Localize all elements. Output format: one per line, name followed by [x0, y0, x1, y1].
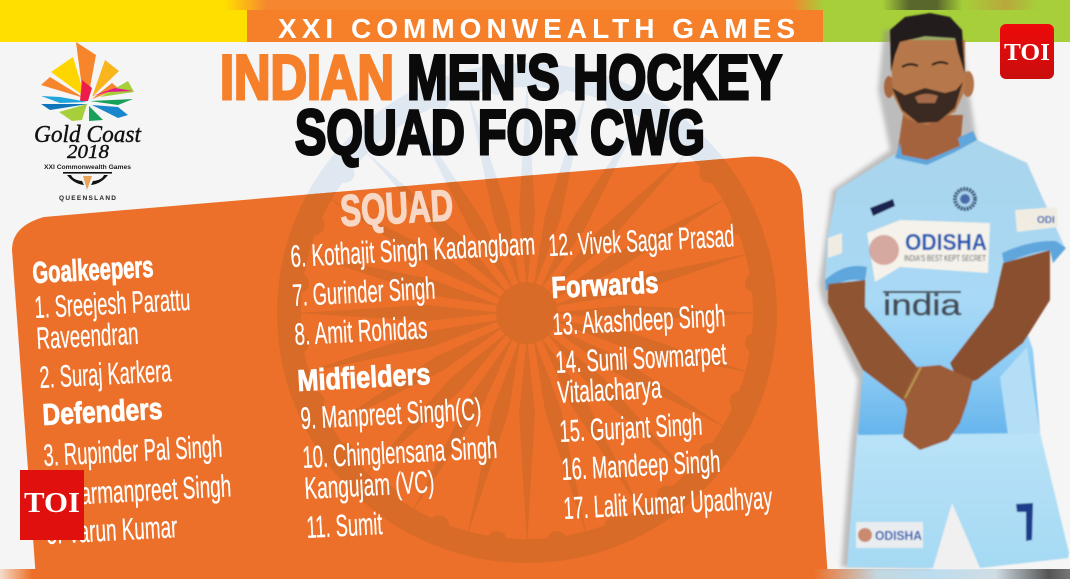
TOI badge: top right — [1000, 24, 1054, 79]
logo: Gold Coast 2018: 2018 — [67, 141, 109, 163]
bottom blurred strip — [0, 569, 1070, 579]
squad column 3: Forwards — [551, 266, 659, 305]
squad column 1: 2. Suraj Karkera — [39, 353, 173, 395]
squad column 2: 6. Kothajit Singh Kadangbam — [290, 226, 536, 274]
squad column 1: Goalkeepers — [32, 251, 154, 290]
collar — [895, 131, 977, 165]
squad column 1: 5. Varun Kumar — [46, 509, 178, 551]
squad column 2: 7. Gurinder Singh — [292, 271, 436, 313]
sleeve cuffs — [825, 266, 867, 291]
squad column 2: 9. Manpreet Singh(C) — [300, 392, 482, 436]
hair — [890, 13, 965, 74]
beard — [892, 82, 963, 123]
squad column 2: 8. Amit Rohidas — [294, 310, 428, 352]
squad column 3: 12. Vivek Sagar Prasad — [548, 218, 735, 263]
squad column 2: Midfielders — [297, 358, 431, 398]
orange squad panel — [12, 157, 828, 579]
squad column 1: Raveendran — [36, 316, 139, 356]
left arm — [828, 280, 925, 402]
title: SQUAD FOR CWG — [295, 98, 705, 168]
squad column 1 — [32, 251, 232, 551]
logo: Gold Coast 2018: XXI Commonwealth Games — [44, 164, 131, 171]
ashoka chakra watermark — [287, 73, 767, 553]
squad column 2: 10. Chinglensana Singh — [302, 430, 498, 475]
squad column 3: 16. Mandeep Singh — [561, 444, 721, 487]
squad column 3 — [548, 218, 773, 526]
header band — [0, 0, 1070, 44]
squad column 1: 3. Rupinder Pal Singh — [43, 429, 223, 473]
hands — [903, 365, 973, 450]
player shadow — [819, 30, 1000, 567]
shorts — [847, 433, 1069, 568]
squad column 1: 1. Sreejesh Parattu — [34, 282, 191, 325]
chakra on panel — [277, 158, 777, 563]
player photo: ODI — [1037, 215, 1055, 226]
shirt number — [1016, 503, 1033, 541]
logo burst — [41, 42, 134, 121]
shirt maker logo — [870, 199, 895, 216]
squad column 2: Kangujam (VC) — [304, 464, 435, 506]
title: MEN'S HOCKEY — [407, 43, 782, 113]
player photo: INDIA'S BEST KEPT SECRET — [904, 253, 986, 263]
face — [890, 40, 965, 125]
squad column 2: 11. Sumit — [306, 506, 383, 545]
crest — [955, 189, 975, 209]
gap between legs — [933, 503, 980, 569]
TOI badge: top right: TOI — [1004, 40, 1050, 66]
player photo — [819, 13, 1069, 569]
jersey side panel — [1000, 347, 1040, 435]
squad heading: SQUAD — [339, 181, 454, 236]
TOI badge: left: TOI — [24, 488, 80, 519]
squad column 3: Vitalacharya — [557, 370, 663, 410]
squad column 1: 4. Harmanpreet Singh — [45, 468, 232, 513]
right arm — [950, 250, 1050, 385]
sponsor patch — [867, 220, 990, 282]
player photo: ODISHA — [905, 229, 987, 255]
squad column 3: 17. Lalit Kumar Upadhyay — [563, 480, 773, 526]
shorts patch — [856, 522, 923, 548]
ears — [884, 76, 894, 98]
squad column 2 — [290, 226, 536, 545]
squad column 3: 15. Gurjant Singh — [559, 407, 703, 449]
squad column 3: 13. Akashdeep Singh — [552, 298, 726, 342]
logo wordmark: Gold Coast — [34, 122, 142, 148]
squad column 1: Defenders — [42, 393, 163, 432]
TOI badge: left — [20, 470, 84, 540]
player photo: ODISHA — [875, 529, 922, 543]
eyes — [902, 62, 948, 67]
header text: XXI COMMONWEALTH GAMES — [278, 13, 795, 44]
india wordmark: india — [883, 289, 961, 322]
logo: Gold Coast 2018: QUEENSLAND — [59, 195, 116, 202]
jersey — [825, 140, 1065, 435]
logo: Gold Coast 2018 — [34, 42, 142, 202]
neck — [897, 115, 963, 166]
squad column 3: 14. Sunil Sowmarpet — [555, 336, 727, 380]
title: INDIAN — [220, 43, 394, 113]
sleeve patches — [1015, 207, 1058, 232]
bracelet — [905, 367, 921, 398]
title — [220, 43, 782, 168]
